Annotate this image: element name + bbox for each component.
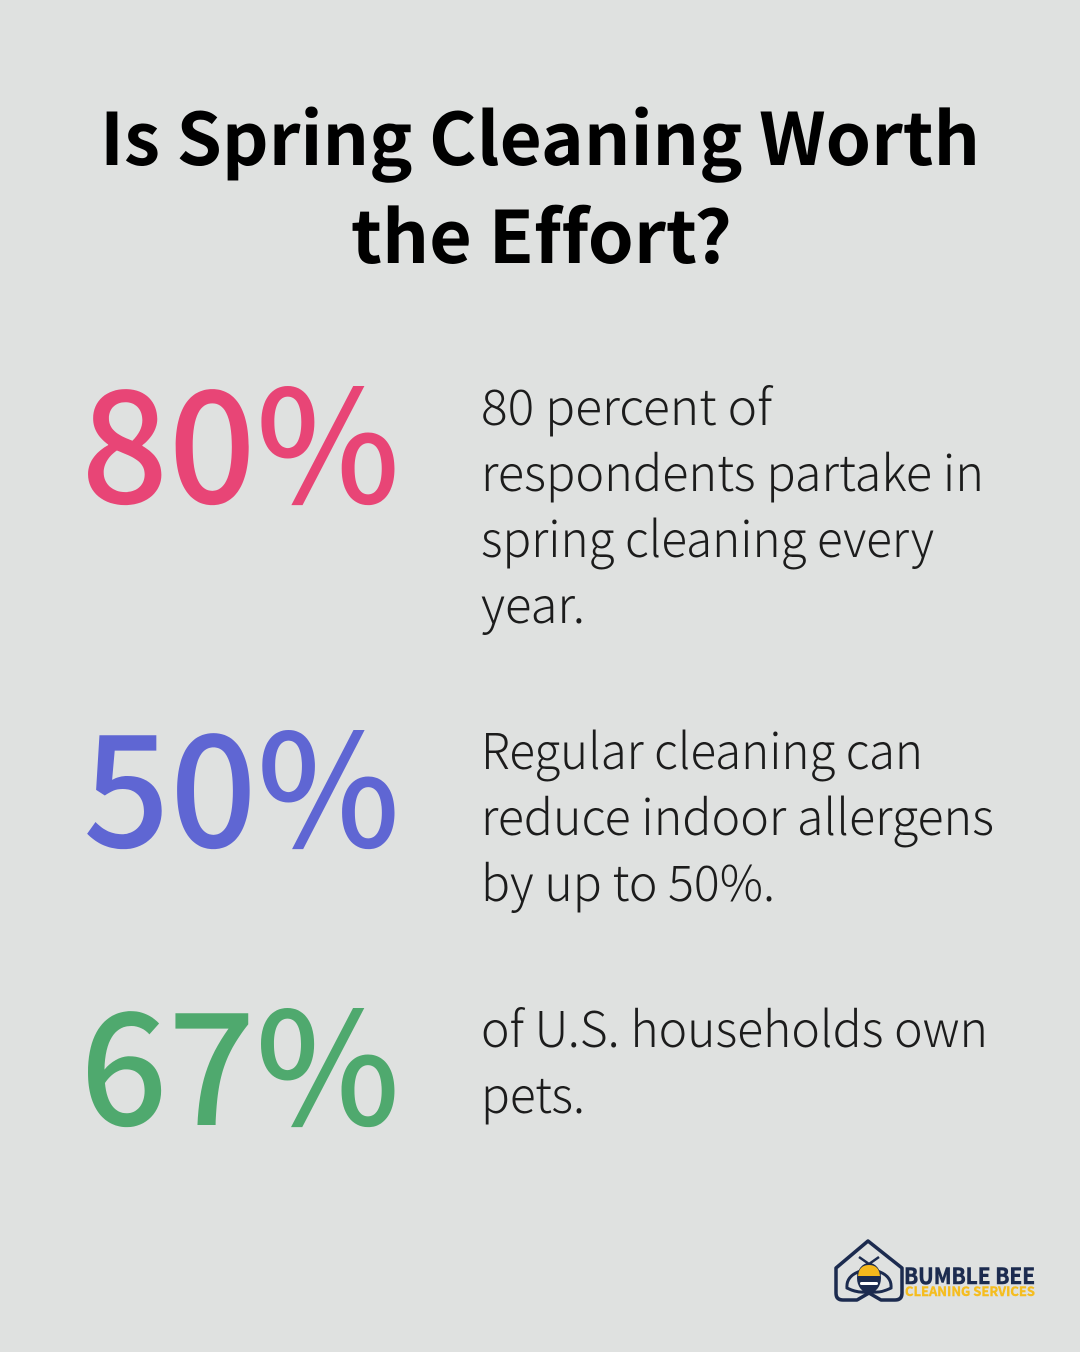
text: 67 percent description xyxy=(481,991,988,1128)
text: 50 percent description xyxy=(481,713,994,916)
stat: 80%: 80% xyxy=(81,322,400,548)
logo wordmark: BUMBLE BEE xyxy=(904,1259,1035,1291)
logo: Bumble Bee Cleaning Services xyxy=(836,1241,1035,1300)
logo tagline: CLEANING SERVICES xyxy=(905,1281,1035,1300)
title xyxy=(100,81,980,284)
title: the Effort? xyxy=(351,179,732,284)
text: 67 percent description: pets. xyxy=(481,1057,585,1128)
text: 80 percent description xyxy=(481,369,984,638)
icon: house with bee xyxy=(836,1241,902,1300)
text: 67 percent description: of U.S. households own xyxy=(481,991,988,1062)
title: Is Spring Cleaning Worth xyxy=(100,81,980,186)
text: 80 percent description: year. xyxy=(481,567,585,638)
text: 50 percent description: reduce indoor allergens xyxy=(481,779,994,850)
text: 50 percent description: Regular cleaning can xyxy=(481,713,923,784)
text: 80 percent description: spring cleaning every xyxy=(481,501,934,572)
text: 50 percent description: by up to 50%. xyxy=(481,845,775,916)
stat: 50%: 50% xyxy=(83,666,400,892)
text: 80 percent description: respondents partake in xyxy=(481,435,984,506)
stat: 67%: 67% xyxy=(80,944,400,1170)
text: 80 percent description: 80 percent of xyxy=(481,369,774,440)
